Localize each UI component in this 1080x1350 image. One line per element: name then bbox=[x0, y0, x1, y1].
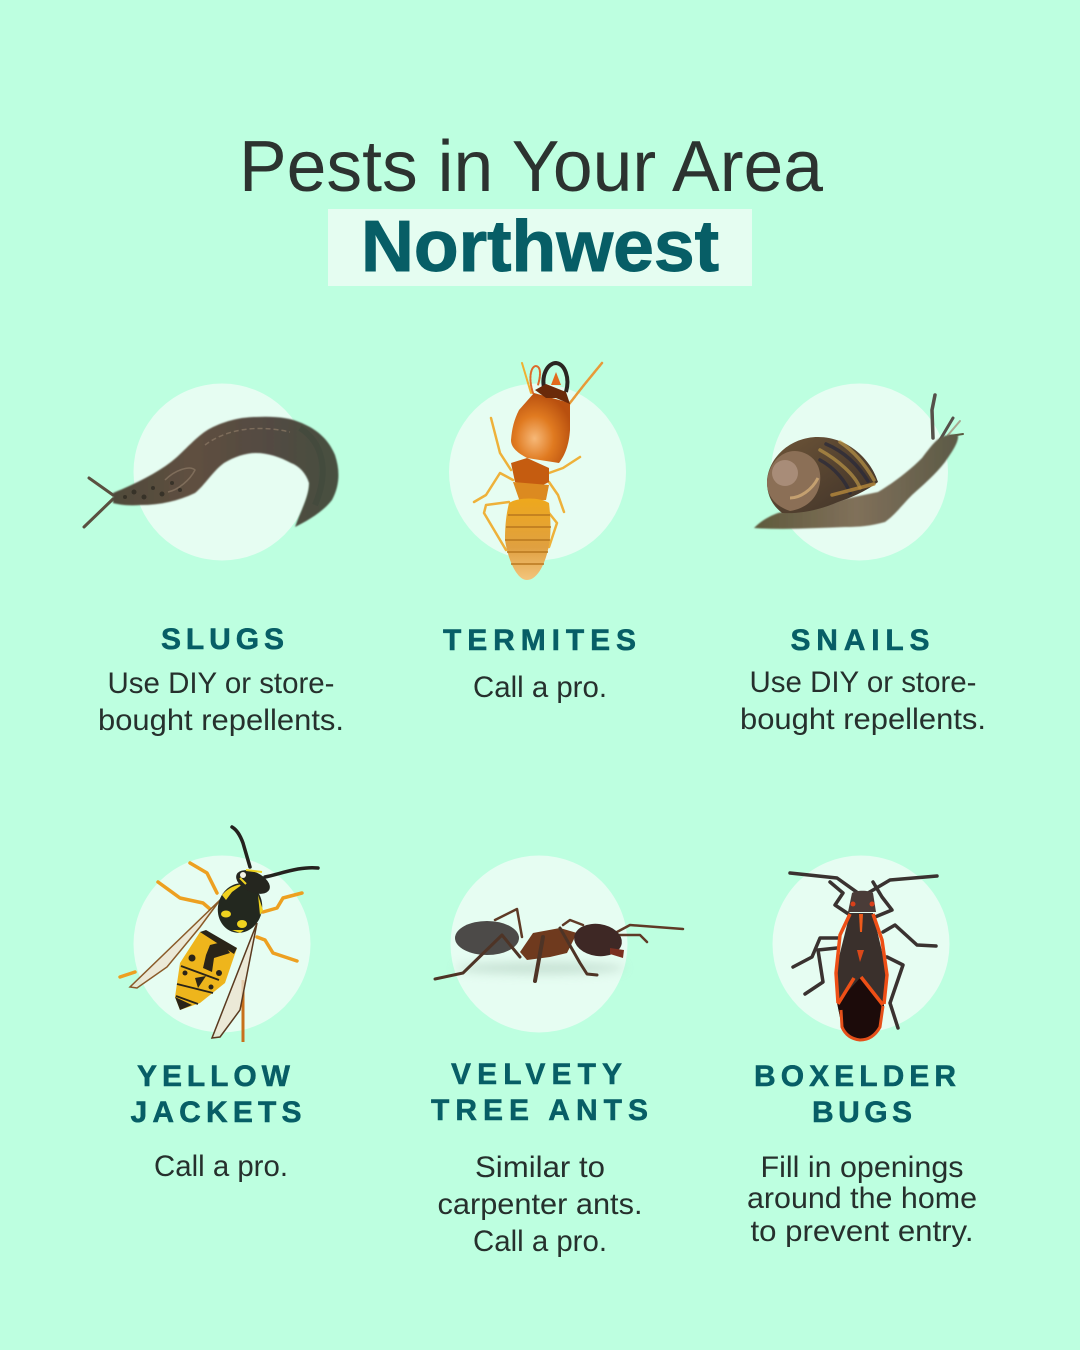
text: boxelder bugs advice: Fill in openings bbox=[760, 1151, 964, 1184]
panel: yellow jackets bbox=[120, 827, 318, 1183]
text: snails advice: Use DIY or store- bbox=[750, 666, 976, 699]
text: snails advice bbox=[740, 666, 986, 736]
text: slugs advice: Use DIY or store- bbox=[108, 667, 334, 700]
icon: termite bbox=[449, 363, 626, 580]
heading: yellow jackets bbox=[130, 1060, 302, 1129]
heading: boxelder bugs: BUGS bbox=[812, 1096, 912, 1129]
text: slugs advice: bought repellents. bbox=[98, 704, 344, 737]
icon: boxelder bug bbox=[772, 856, 950, 1040]
heading: velvety tree ants: VELVETY bbox=[451, 1058, 622, 1091]
panel: snails bbox=[740, 384, 986, 736]
text: boxelder bugs advice bbox=[747, 1151, 977, 1248]
text: boxelder bugs advice: to prevent entry. bbox=[750, 1215, 974, 1248]
text: velvety tree ants advice: Similar to bbox=[475, 1151, 605, 1184]
heading: termites: TERMITES bbox=[443, 624, 636, 657]
text: velvety tree ants advice: carpenter ants. bbox=[438, 1188, 642, 1221]
heading: boxelder bugs: BOXELDER bbox=[754, 1060, 956, 1093]
heading: slugs: SLUGS bbox=[161, 623, 284, 656]
heading: velvety tree ants bbox=[431, 1058, 648, 1127]
heading: yellow jackets: YELLOW bbox=[137, 1060, 291, 1093]
icon: snail bbox=[754, 384, 963, 560]
heading: snails: SNAILS bbox=[790, 624, 930, 657]
heading: boxelder bugs bbox=[754, 1060, 956, 1129]
panel: slugs bbox=[84, 384, 344, 737]
title: Pests in Your Area bbox=[239, 127, 824, 207]
region highlight: Northwest: Northwest bbox=[361, 207, 719, 287]
text: termites advice: Call a pro. bbox=[473, 671, 607, 704]
heading: yellow jackets: JACKETS bbox=[130, 1096, 302, 1129]
text: snails advice: bought repellents. bbox=[740, 703, 986, 736]
icon: velvety tree ant bbox=[435, 856, 683, 1032]
panel: boxelder bugs bbox=[747, 856, 977, 1248]
icon: yellow jacket bbox=[120, 827, 318, 1042]
text: velvety tree ants advice: Call a pro. bbox=[473, 1225, 607, 1258]
text: yellow jackets advice: Call a pro. bbox=[154, 1150, 288, 1183]
text: slugs advice bbox=[98, 667, 344, 737]
panel: velvety tree ants bbox=[431, 856, 683, 1258]
heading: velvety tree ants: TREE ANTS bbox=[431, 1094, 648, 1127]
text: velvety tree ants advice bbox=[438, 1151, 642, 1258]
icon: slug bbox=[84, 384, 338, 560]
panel: termites bbox=[443, 363, 636, 704]
text: boxelder bugs advice: around the home bbox=[747, 1182, 977, 1215]
